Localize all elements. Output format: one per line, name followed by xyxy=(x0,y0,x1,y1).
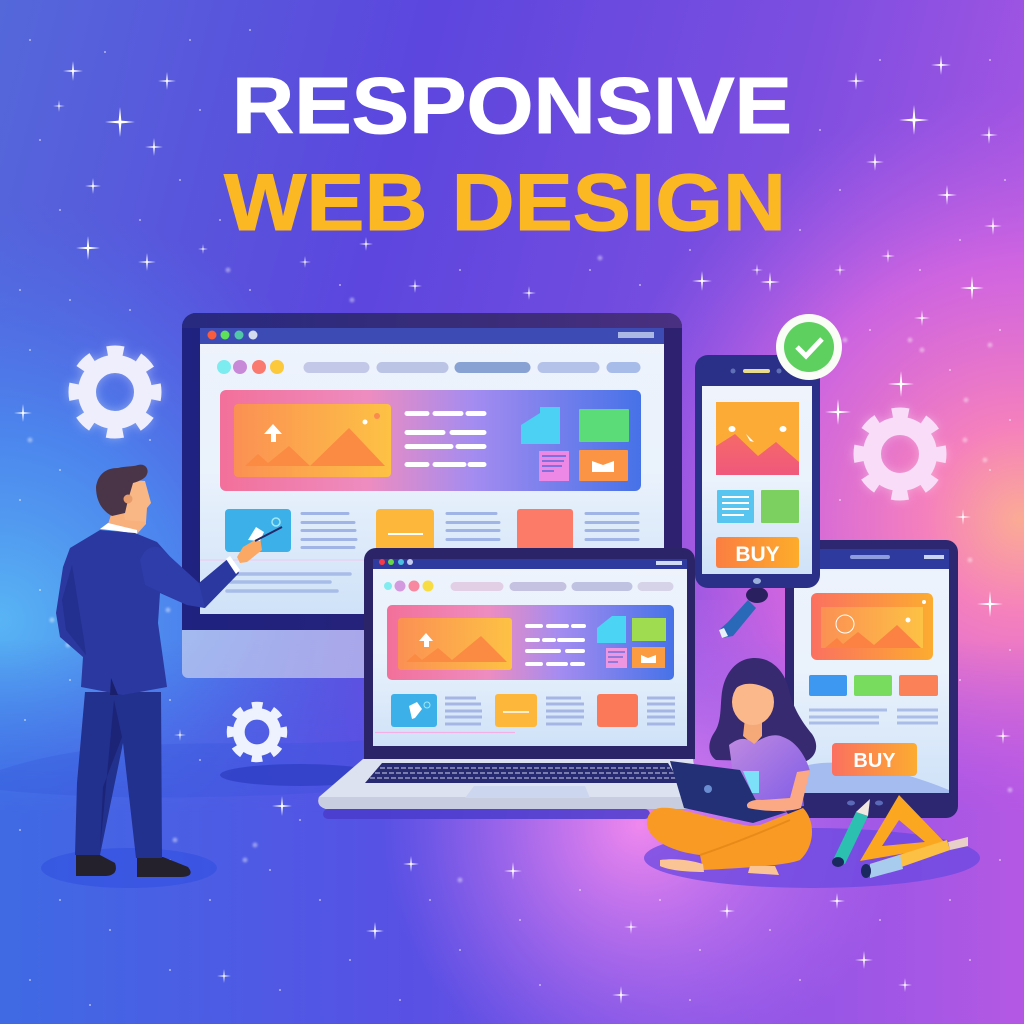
woman arm xyxy=(747,770,810,811)
laptop xyxy=(318,548,700,819)
laptop nav xyxy=(384,580,669,592)
phone tiles xyxy=(717,490,799,523)
phone screen xyxy=(702,386,812,574)
monitor frame xyxy=(182,313,682,630)
tablet xyxy=(785,540,958,818)
phone BUY button xyxy=(716,537,799,568)
drawing tools xyxy=(832,795,968,878)
triangle ruler xyxy=(860,795,948,861)
title xyxy=(224,61,792,248)
laptop lid xyxy=(364,548,695,759)
laptop content row xyxy=(375,694,675,732)
man presenting xyxy=(56,465,282,877)
lower pencil xyxy=(870,840,950,878)
stylus xyxy=(248,527,282,541)
icon: gear right xyxy=(862,416,938,492)
tablet BUY button: BUY xyxy=(853,750,896,772)
woman hair xyxy=(709,658,816,762)
laptop hero xyxy=(387,605,674,680)
teal pencil xyxy=(833,812,868,864)
tablet screen xyxy=(794,549,949,793)
man shoes xyxy=(76,855,116,876)
icon: green check badge xyxy=(776,314,842,380)
lap laptop xyxy=(670,761,787,823)
man jacket xyxy=(56,530,239,695)
woman with laptop xyxy=(647,658,816,875)
hero banner xyxy=(220,390,641,491)
keyboard xyxy=(365,763,680,783)
title line 2: WEB DESIGN xyxy=(224,158,786,248)
man hand xyxy=(237,537,262,563)
woman feet xyxy=(660,859,704,872)
browser bar xyxy=(200,328,664,344)
monitor stand xyxy=(182,625,372,678)
man face xyxy=(120,480,151,522)
woman neck and face xyxy=(743,718,762,745)
icon: gear small xyxy=(232,707,282,757)
phone xyxy=(695,355,820,588)
tablet text lines xyxy=(809,710,938,723)
phone frame xyxy=(695,355,820,588)
laptop browser bar xyxy=(373,559,687,569)
nav dots and menu xyxy=(217,360,635,374)
phone BUY button: BUY xyxy=(735,543,780,566)
laptop shadow xyxy=(323,809,650,819)
title line 1: RESPONSIVE xyxy=(232,61,792,150)
tablet tiles xyxy=(809,675,938,696)
laptop screen xyxy=(373,559,687,746)
ground shadows xyxy=(41,764,980,888)
woman shirt xyxy=(729,735,810,810)
icon: gear left xyxy=(77,354,153,430)
content row xyxy=(200,509,638,591)
stylus under phone xyxy=(719,587,768,638)
laptop base xyxy=(318,759,700,809)
tablet frame xyxy=(785,540,958,818)
trackpad xyxy=(465,786,590,798)
tablet BUY button xyxy=(832,743,917,776)
desktop monitor xyxy=(182,313,682,678)
tablet hero xyxy=(811,593,933,660)
phone image xyxy=(716,402,799,475)
man trousers xyxy=(75,692,162,858)
woman legs xyxy=(647,808,812,870)
man neck xyxy=(108,512,146,534)
monitor screen xyxy=(200,328,664,614)
man shirt cuff xyxy=(226,556,240,574)
tablet header xyxy=(794,549,949,569)
man hair xyxy=(96,465,148,516)
phone speaker xyxy=(730,368,782,374)
man collar xyxy=(100,523,137,534)
